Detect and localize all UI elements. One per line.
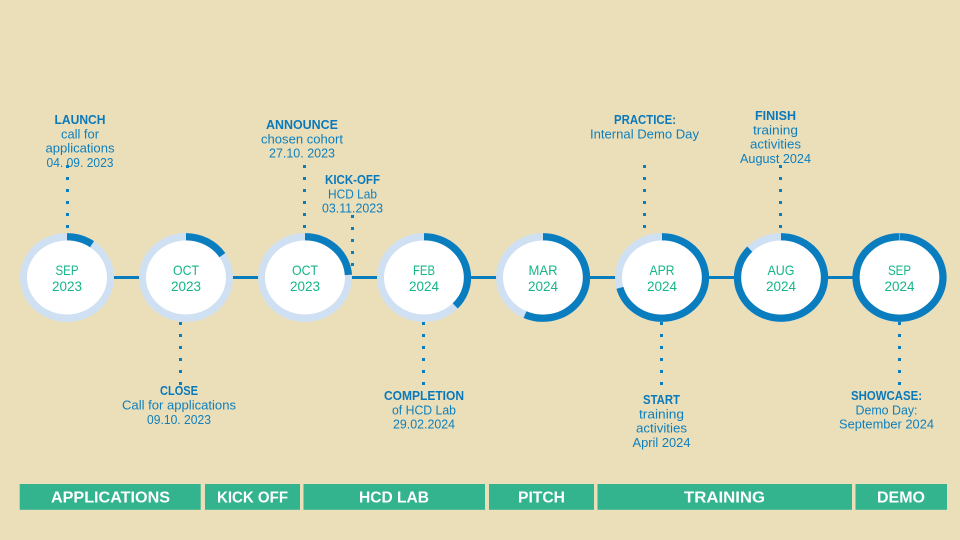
callout: finish training activities: August 2024 (740, 152, 811, 166)
milestone: Aug 2024 progress circle (734, 233, 828, 322)
milestone: Sep 2024 progress circle (852, 233, 946, 322)
callout: completion of HCD Lab: COMPLETION (384, 389, 464, 403)
callout: kick-off HCD Lab (322, 173, 383, 267)
phase bar: HCD lab: HCD LAB (359, 490, 429, 507)
callout: finish training activities: activities (750, 138, 801, 152)
callout: showcase demo day: SHOWCASE: (851, 389, 922, 403)
callout: announce chosen cohort: chosen cohort (261, 132, 344, 146)
milestone: Mar 2024 progress circle (496, 233, 590, 322)
milestone: Apr 2024 progress circle (615, 233, 709, 322)
callout: start training activities (632, 322, 691, 450)
callout: launch call for applications: LAUNCH (54, 113, 106, 127)
callout: announce chosen cohort: ANNOUNCE (266, 118, 338, 132)
callout: finish training activities: FINISH (755, 109, 796, 123)
callout: practice internal demo day: Internal Demo Day (590, 127, 700, 141)
callout: kick-off HCD Lab: HCD Lab (328, 187, 377, 201)
callout: kick-off HCD Lab: 03.11.2023 (322, 202, 383, 216)
callout: showcase demo day: September 2024 (839, 418, 934, 432)
callout: launch call for applications: call for (61, 127, 99, 141)
milestone: Oct 2023 progress circle (announce): 2023 (290, 278, 320, 294)
callout: completion of HCD Lab (384, 322, 464, 432)
milestone: Sep 2023 progress circle: 2023 (52, 278, 82, 294)
callout: showcase demo day: Demo Day: (856, 403, 918, 417)
milestone: Oct 2023 progress circle (close): 2023 (171, 278, 201, 294)
milestone: Aug 2024 progress circle: AUG (768, 262, 794, 278)
callout: start training activities: April 2024 (632, 436, 691, 450)
callout: showcase demo day (839, 322, 934, 432)
phase bar: kick off (205, 484, 300, 510)
phase bar: applications (20, 484, 201, 510)
milestone: Aug 2024 progress circle: 2024 (766, 278, 796, 294)
phase bar: pitch (489, 484, 594, 510)
milestone: Apr 2024 progress circle: 2024 (647, 278, 677, 294)
phase bar: demo: DEMO (877, 490, 925, 507)
callout: close call for applications (122, 322, 236, 427)
callout: start training activities: training (639, 407, 684, 421)
phase bar: demo (856, 484, 947, 510)
milestone: Sep 2023 progress circle: SEP (56, 262, 78, 278)
callout: announce chosen cohort: 27.10. 2023 (269, 147, 335, 161)
phase bar: pitch: PITCH (518, 490, 565, 507)
callout: launch call for applications: 04. 09. 2023 (46, 156, 114, 170)
milestone: Oct 2023 progress circle (close) (139, 233, 233, 322)
milestone: Sep 2024 progress circle: SEP (888, 262, 911, 278)
phase bar: HCD lab (304, 484, 485, 510)
milestone: Feb 2024 progress circle: FEB (413, 262, 435, 278)
milestone: Apr 2024 progress circle: APR (650, 262, 674, 278)
callout: practice internal demo day: PRACTICE: (614, 113, 676, 127)
timeline connector line (67, 276, 899, 279)
phase bar: kick off: KICK OFF (217, 490, 288, 507)
callout: finish training activities (740, 109, 811, 229)
milestone: Feb 2024 progress circle: 2024 (409, 278, 439, 294)
phase bar: applications: APPLICATIONS (51, 490, 170, 507)
callout: completion of HCD Lab: of HCD Lab (392, 403, 456, 417)
callout: launch call for applications (46, 113, 114, 229)
phase bar: training (598, 484, 852, 510)
callout: finish training activities: training (753, 123, 798, 137)
callout: launch call for applications: applications (46, 142, 114, 156)
callout: start training activities: activities (636, 422, 687, 436)
callout: start training activities: START (643, 393, 680, 407)
callout: practice internal demo day (590, 113, 700, 229)
callout: close call for applications: 09.10. 2023 (147, 413, 211, 427)
callout: completion of HCD Lab: 29.02.2024 (393, 418, 455, 432)
callout: announce chosen cohort (261, 118, 344, 229)
milestone: Mar 2024 progress circle: 2024 (528, 278, 558, 294)
milestone: Oct 2023 progress circle (close): OCT (173, 262, 199, 278)
milestone: Feb 2024 progress circle (377, 233, 471, 322)
callout: close call for applications: CLOSE (160, 384, 198, 398)
callout: kick-off HCD Lab: KICK-OFF (325, 173, 380, 187)
callout: close call for applications: Call for applications (122, 398, 236, 412)
milestone: Sep 2023 progress circle (20, 233, 114, 322)
milestone: Mar 2024 progress circle: MAR (528, 262, 558, 278)
milestone: Sep 2024 progress circle: 2024 (884, 278, 915, 294)
milestone: Oct 2023 progress circle (announce): OCT (292, 262, 318, 278)
phase bar: training: TRAINING (684, 490, 765, 507)
milestone: Oct 2023 progress circle (announce) (258, 233, 352, 322)
